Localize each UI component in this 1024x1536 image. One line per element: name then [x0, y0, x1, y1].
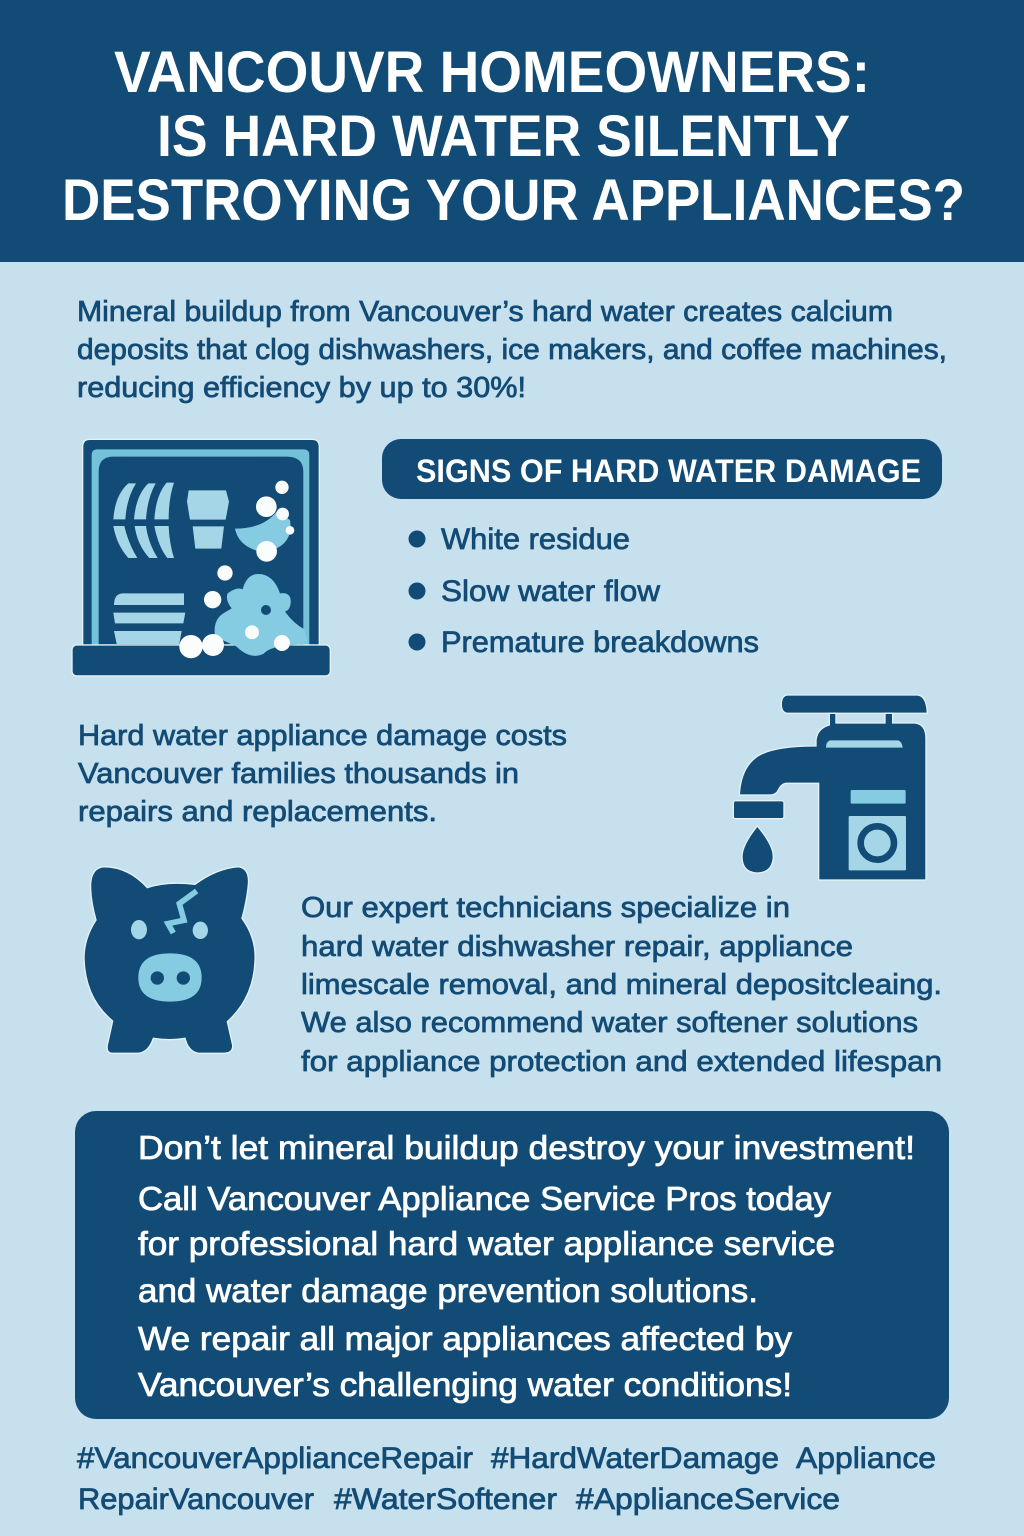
bubbles	[179, 481, 294, 658]
cost paragraph: repairs and replacements.	[78, 796, 437, 828]
services paragraph: limescale removal, and mineral depositcleaing.	[301, 969, 942, 1001]
icon: dishwasher	[72, 439, 330, 676]
call to action panel	[75, 1111, 949, 1419]
signs list: Slow water flow	[441, 575, 660, 608]
hashtags: Appliance	[796, 1442, 936, 1475]
title banner: IS HARD WATER SILENTLY	[157, 104, 850, 169]
cost paragraph: Hard water appliance damage costs	[78, 720, 567, 752]
services paragraph: Our expert technicians specialize in	[301, 892, 790, 924]
title banner: VANCOUVR HOMEOWNERS:	[114, 40, 870, 105]
services paragraph: hard water dishwasher repair, appliance	[301, 931, 853, 963]
crack	[168, 891, 197, 933]
call to action panel: Vancouver’s challenging water conditions!	[138, 1366, 792, 1403]
intro paragraph: reducing efficiency by up to 30%!	[77, 372, 526, 404]
services paragraph: for appliance protection and extended lifespan	[301, 1046, 942, 1078]
call to action panel: and water damage prevention solutions.	[138, 1272, 758, 1309]
signs list: White residue	[441, 523, 630, 556]
call to action panel: We repair all major appliances affected by	[138, 1320, 793, 1357]
hashtags: #VancouverApplianceRepair	[77, 1442, 473, 1475]
services paragraph: We also recommend water softener solutions	[301, 1007, 918, 1039]
bowl	[235, 512, 291, 551]
intro paragraph	[77, 296, 947, 404]
signs list	[408, 523, 759, 659]
title banner	[0, 0, 1024, 262]
cost paragraph: Vancouver families thousands in	[78, 758, 519, 790]
hashtags: #WaterSoftener	[334, 1483, 557, 1516]
intro paragraph: deposits that clog dishwashers, ice makers, and coffee machines,	[77, 334, 947, 366]
foam	[215, 574, 308, 656]
call to action panel: Don’t let mineral buildup destroy your investment!	[138, 1129, 915, 1166]
hashtags: RepairVancouver	[78, 1483, 314, 1516]
call to action panel: for professional hard water appliance service	[138, 1225, 835, 1262]
services paragraph	[301, 892, 942, 1078]
signs heading pill: SIGNS OF HARD WATER DAMAGE	[416, 453, 921, 489]
plates	[113, 483, 229, 644]
hashtags: #ApplianceService	[576, 1483, 840, 1516]
cost paragraph	[78, 720, 567, 828]
title banner: DESTROYING YOUR APPLIANCES?	[62, 168, 965, 233]
signs heading pill	[382, 439, 942, 499]
icon: faucet and appliance	[733, 695, 927, 880]
call to action panel: Call Vancouver Appliance Service Pros today	[138, 1180, 832, 1217]
signs list: Premature breakdowns	[441, 626, 759, 659]
icon: cracked piggy bank	[84, 867, 255, 1053]
intro paragraph: Mineral buildup from Vancouver’s hard water creates calcium	[77, 296, 893, 328]
hashtags: #HardWaterDamage	[491, 1442, 779, 1475]
hashtags	[77, 1442, 936, 1516]
base	[72, 645, 330, 676]
